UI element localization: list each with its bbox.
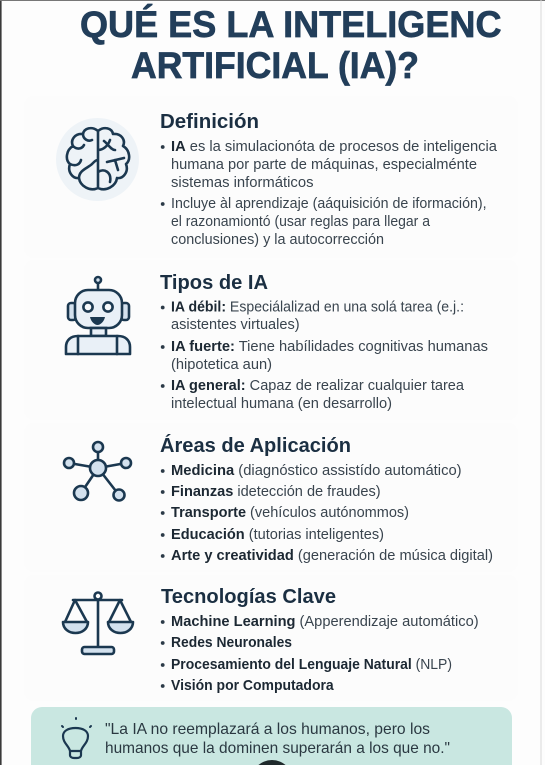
panel: definición	[24, 96, 518, 258]
text block: tipos de IA: IA fuerte: Tiene habílidades cognitivas humanas	[171, 338, 488, 355]
text block: tecnologías clave	[161, 613, 479, 694]
heading: áreas de aplicación: Áreas de Aplicación	[160, 434, 351, 457]
text block: áreas de aplicación: Educación (tutorias inteligentes)	[171, 526, 384, 543]
text block: tipos de IA: IA débil: Especiálalizad en una solá tarea (e.j.:	[171, 298, 464, 316]
heading: tecnologías clave: Tecnologías Clave	[161, 585, 336, 608]
partial dark circle	[251, 760, 293, 765]
text block: definición: sistemas informáticos	[171, 174, 314, 191]
text block: definición: humana por parte de máquinas, especialménte	[171, 156, 477, 173]
heading: definición: Definición	[160, 110, 259, 133]
text block: áreas de aplicación	[161, 462, 493, 564]
text block: definición	[161, 138, 498, 248]
text block: tecnologías clave: Machine Learning (Apperendizaje automático)	[171, 613, 479, 630]
text block: tecnologías clave: Visión por Computadora	[171, 677, 334, 694]
text block: áreas de aplicación: Medicina (diagnóstico assistído automático)	[171, 462, 462, 479]
text block: tipos de IA: intelectual humana (en desarrollo)	[171, 395, 392, 412]
text block: tipos de IA: IA general: Capaz de realizar cualquier tarea	[171, 377, 465, 394]
quote text: humanos que la dominen superarán a los que no."	[105, 740, 450, 757]
title: ARTIFICIAL (IA)?	[131, 45, 419, 86]
text block: tecnologías clave: Redes Neuronales	[171, 634, 292, 651]
text block: áreas de aplicación: Finanzas idetección de fraudes)	[171, 483, 381, 500]
callout: quote	[31, 707, 512, 765]
text block: tipos de IA: asistentes virtuales)	[171, 316, 300, 333]
quote text	[105, 721, 450, 757]
text block: tipos de IA: (hipotetica aun)	[171, 356, 272, 373]
title	[80, 4, 502, 86]
text block: tipos de IA	[161, 298, 488, 412]
title: QUÉ ES LA INTELIGENC	[80, 4, 502, 45]
text block: tecnologías clave: Procesamiento del Lenguaje Natural (NLP)	[171, 656, 452, 673]
text block: áreas de aplicación: Transporte (vehículos autónommos)	[171, 504, 409, 521]
heading: tipos de IA: Tipos de IA	[160, 271, 268, 294]
text block: definición: el razonamiontó (usar reglas para llegar a	[171, 213, 431, 230]
icon: brain	[56, 118, 139, 201]
text block: definición: IA es la simulacionóta de procesos de inteligencia	[171, 138, 498, 155]
text block: áreas de aplicación: Arte y creatividad (generación de música digital)	[171, 547, 493, 564]
panel: tecnologías clave	[24, 575, 518, 701]
panel: tipos de IA	[24, 260, 518, 420]
icon: scales	[63, 592, 133, 654]
text block: definición: conclusiones) y la autocorrección	[171, 231, 384, 248]
icon: robot	[66, 277, 130, 354]
text block: definición: Incluye àl aprendizaje (aáquisición de iformación),	[171, 195, 487, 212]
icon: network	[64, 442, 131, 500]
quote text: "La IA no reemplazará a los humanos, pero los	[105, 721, 430, 738]
icon: light bulb	[62, 718, 91, 758]
panel: áreas de aplicación	[24, 423, 518, 572]
